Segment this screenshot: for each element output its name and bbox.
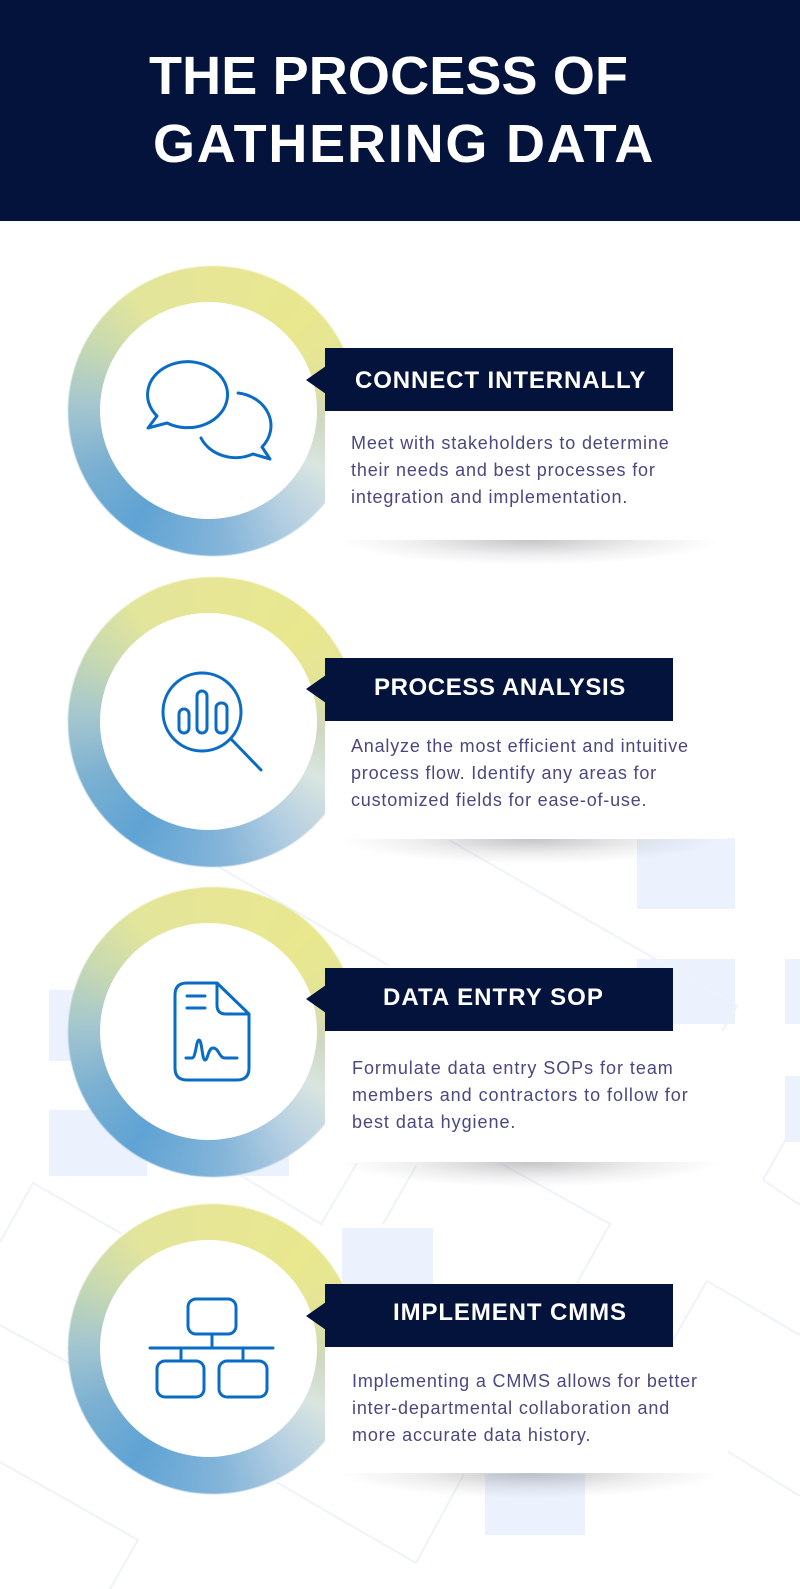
description [351, 433, 670, 507]
description [351, 736, 689, 810]
panel: connect internally [68, 265, 684, 560]
heading: DATA ENTRY SOP [383, 984, 604, 1011]
banner pointer [306, 675, 326, 703]
gradient ring [68, 1204, 358, 1494]
header banner [0, 0, 800, 221]
card shadow [330, 1162, 730, 1188]
title line 2: GATHERING DATA [153, 114, 655, 174]
banner pointer [306, 366, 326, 394]
description: inter-departmental collaboration and [352, 1398, 670, 1418]
panel: data entry sop [68, 886, 723, 1182]
description: Meet with stakeholders to determine [351, 433, 670, 453]
inner white circle [100, 613, 317, 830]
text card [325, 721, 728, 839]
description [352, 1058, 689, 1132]
heading banner [325, 1284, 673, 1347]
panel: implement cmms [68, 1203, 728, 1495]
gradient ring [68, 887, 358, 1177]
inner white circle [100, 1240, 317, 1457]
icon: network hierarchy [148, 1298, 274, 1398]
text card [325, 1347, 728, 1473]
card shadow [330, 540, 730, 566]
heading: CONNECT INTERNALLY [355, 367, 646, 394]
text card [325, 1031, 728, 1162]
description [352, 1371, 698, 1445]
gradient ring [68, 266, 358, 556]
description: customized fields for ease-of-use. [351, 790, 647, 810]
description: their needs and best processes for [351, 460, 656, 480]
inner white circle [100, 302, 317, 519]
banner pointer [306, 985, 326, 1013]
description: Formulate data entry SOPs for team [352, 1058, 674, 1078]
heading banner [325, 968, 673, 1031]
panel: process analysis [68, 576, 728, 868]
heading: IMPLEMENT CMMS [393, 1299, 627, 1326]
icon: chat bubbles [146, 360, 272, 460]
description: Analyze the most efficient and intuitive [351, 736, 689, 756]
heading banner [325, 658, 673, 721]
icon: magnifier with bars [162, 672, 263, 772]
icon: document with chart [174, 981, 250, 1082]
description: Implementing a CMMS allows for better [352, 1371, 698, 1391]
title line 1: THE PROCESS OF [149, 46, 628, 106]
description: members and contractors to follow for [352, 1085, 689, 1105]
heading banner [325, 348, 673, 411]
banner pointer [306, 1302, 326, 1330]
description: best data hygiene. [352, 1112, 516, 1132]
inner white circle [100, 923, 317, 1140]
card shadow [330, 1473, 730, 1499]
gradient ring [68, 577, 358, 867]
description: integration and implementation. [351, 487, 628, 507]
card shadow [330, 839, 730, 865]
heading: PROCESS ANALYSIS [374, 674, 626, 701]
description: more accurate data history. [352, 1425, 591, 1445]
description: process flow. Identify any areas for [351, 763, 657, 783]
text card [325, 411, 728, 540]
